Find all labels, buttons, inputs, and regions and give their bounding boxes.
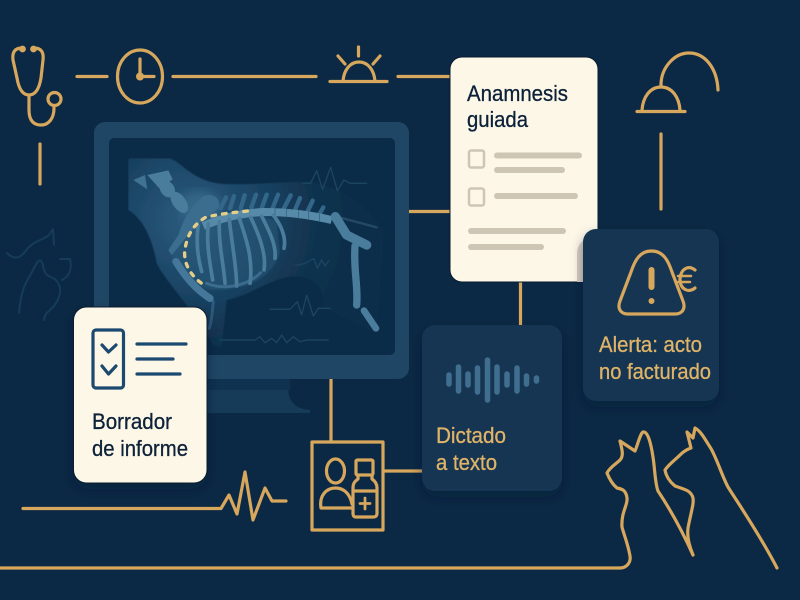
thorax	[195, 218, 280, 290]
icon: warning bell with euro	[619, 251, 695, 314]
label: borrador: de informe	[92, 436, 188, 461]
heading: anamnesis guiada	[467, 81, 568, 132]
heading: anamnesis guiada: Anamnesis	[467, 81, 568, 106]
icon: owner and medicine box	[312, 442, 383, 530]
faint pet outline	[7, 229, 71, 320]
monitor screen	[109, 138, 395, 355]
icon: desk lamp	[637, 53, 718, 112]
icon: stethoscope	[13, 47, 61, 125]
card: alerta acto no facturado	[583, 229, 719, 401]
label: borrador: Borrador	[92, 409, 172, 434]
label: borrador	[92, 409, 188, 461]
folded corner	[577, 238, 598, 282]
icon: checklist	[93, 330, 186, 388]
monitor stand	[200, 379, 310, 413]
label: dictado: Dictado	[436, 423, 506, 448]
icon: clock	[118, 50, 162, 103]
line art: cat and dog with base line	[0, 428, 777, 568]
label: alerta	[599, 332, 711, 384]
pelvis and hind leg	[335, 217, 377, 328]
shoulder bones	[168, 195, 219, 328]
heading: anamnesis guiada: guiada	[467, 107, 528, 132]
card: borrador de informe	[74, 307, 207, 483]
label: dictado: a texto	[436, 450, 497, 475]
label: alerta: Alerta: acto	[599, 332, 702, 357]
dashed heart outline	[185, 211, 247, 283]
x-ray image	[128, 158, 383, 347]
label: dictado	[436, 423, 506, 475]
heartbeat line	[23, 472, 286, 520]
card: dictado a texto	[422, 325, 562, 491]
spine	[203, 212, 332, 226]
monitor	[94, 122, 409, 413]
neck vertebrae	[134, 170, 188, 213]
connector lines	[40, 76, 661, 471]
ribs	[197, 215, 285, 286]
dorsal spines	[221, 195, 323, 217]
monitor frame	[94, 122, 409, 379]
sternum	[207, 273, 261, 287]
checklist rows	[468, 150, 582, 250]
chest highlight	[184, 190, 220, 220]
card: anamnesis guiada	[450, 57, 598, 282]
dog silhouette	[128, 158, 316, 344]
faint ECG traces	[220, 167, 367, 343]
label: alerta: no facturado	[599, 359, 711, 384]
icon: sunrise	[330, 47, 387, 82]
icon: sound wave	[449, 360, 536, 400]
